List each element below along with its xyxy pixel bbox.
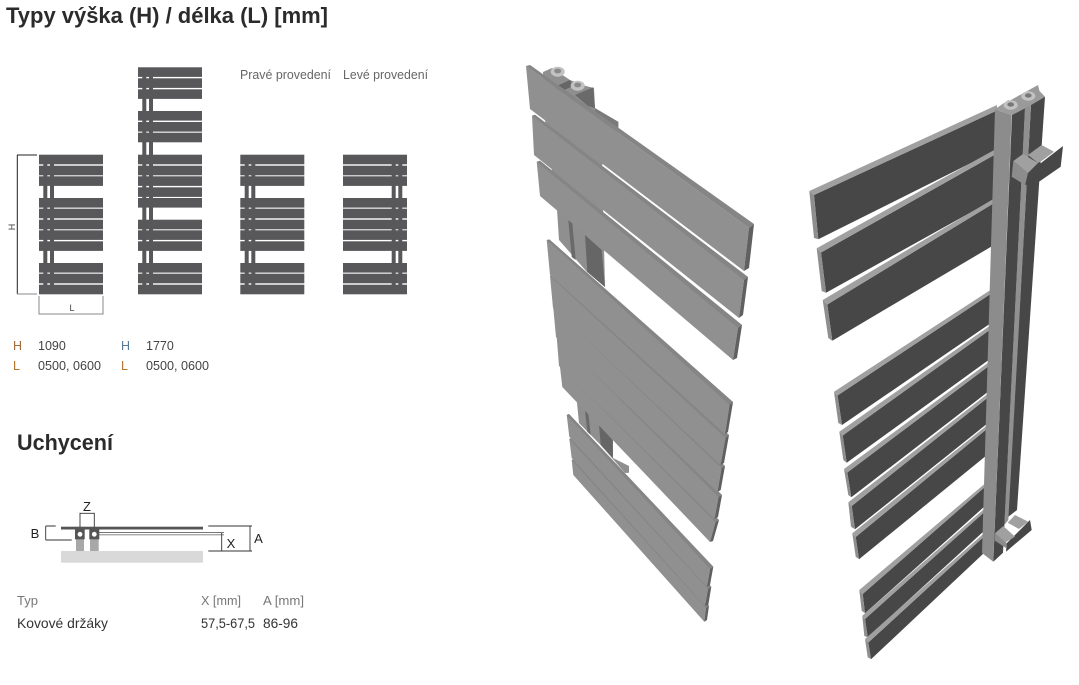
dimensions table: H 1770 — [121, 339, 209, 373]
label: right version: Pravé provedení — [240, 67, 331, 82]
diagram: mounting section: Z — [83, 499, 91, 514]
dimensions table: H 1090: H — [13, 339, 22, 353]
bottom bars — [567, 414, 713, 622]
diagram: mounting section: B — [31, 526, 39, 541]
nuts — [551, 67, 585, 91]
dimensions table: H 1770: H — [121, 339, 130, 353]
dimensions table: H 1770: 0500, 0600 — [146, 359, 209, 373]
mounting table: A [mm] — [263, 593, 304, 608]
dimensions table: H 1770: 1770 — [146, 339, 174, 353]
diagram: right version radiator — [240, 155, 304, 294]
dimensions table: H 1770: L — [121, 359, 128, 373]
upper bracket — [1012, 145, 1063, 185]
panels — [809, 105, 997, 659]
diagram: mounting section: A — [254, 531, 263, 546]
label: left version: Levé provedení — [343, 67, 428, 82]
diagram: radiator H 1090 with dimensions — [7, 155, 103, 314]
main rail — [982, 100, 1025, 562]
diagram: radiator H 1090 with dimensions: H — [7, 224, 17, 230]
mounting table — [17, 593, 304, 631]
heading: mounting: Uchycení — [17, 430, 114, 455]
mounting table: Typ — [17, 593, 38, 608]
dimensions table: H 1090: 1090 — [38, 339, 66, 353]
diagram: left version radiator — [343, 155, 407, 294]
diagram: mounting section — [31, 499, 263, 563]
mounting table: 57,5-67,5 — [201, 615, 255, 631]
dimensions table: H 1090: 0500, 0600 — [38, 359, 101, 373]
mounting table: 86-96 — [263, 615, 298, 631]
illustration: radiator front 3D view — [809, 85, 1063, 659]
top surface behind nuts — [1000, 85, 1045, 115]
brackets and rails behind bars — [543, 68, 629, 473]
diagram: mounting section: X — [227, 536, 236, 551]
second rail — [1004, 97, 1045, 525]
title: types: Typy výška (H) / délka (L) [mm] — [6, 3, 328, 28]
dimensions table: H 1090 — [13, 339, 101, 373]
mounting table: Kovové držáky — [17, 615, 108, 631]
lower bracket — [995, 515, 1032, 552]
nuts — [1004, 91, 1035, 110]
diagram: radiator H 1090 with dimensions: L — [69, 303, 75, 313]
illustration: radiator rear 3D view — [526, 65, 754, 622]
diagram: radiator H 1770 — [138, 67, 202, 294]
dimensions table: H 1090: L — [13, 359, 20, 373]
top bars — [526, 65, 754, 360]
middle bars — [547, 240, 733, 542]
mounting table: X [mm] — [201, 593, 241, 608]
